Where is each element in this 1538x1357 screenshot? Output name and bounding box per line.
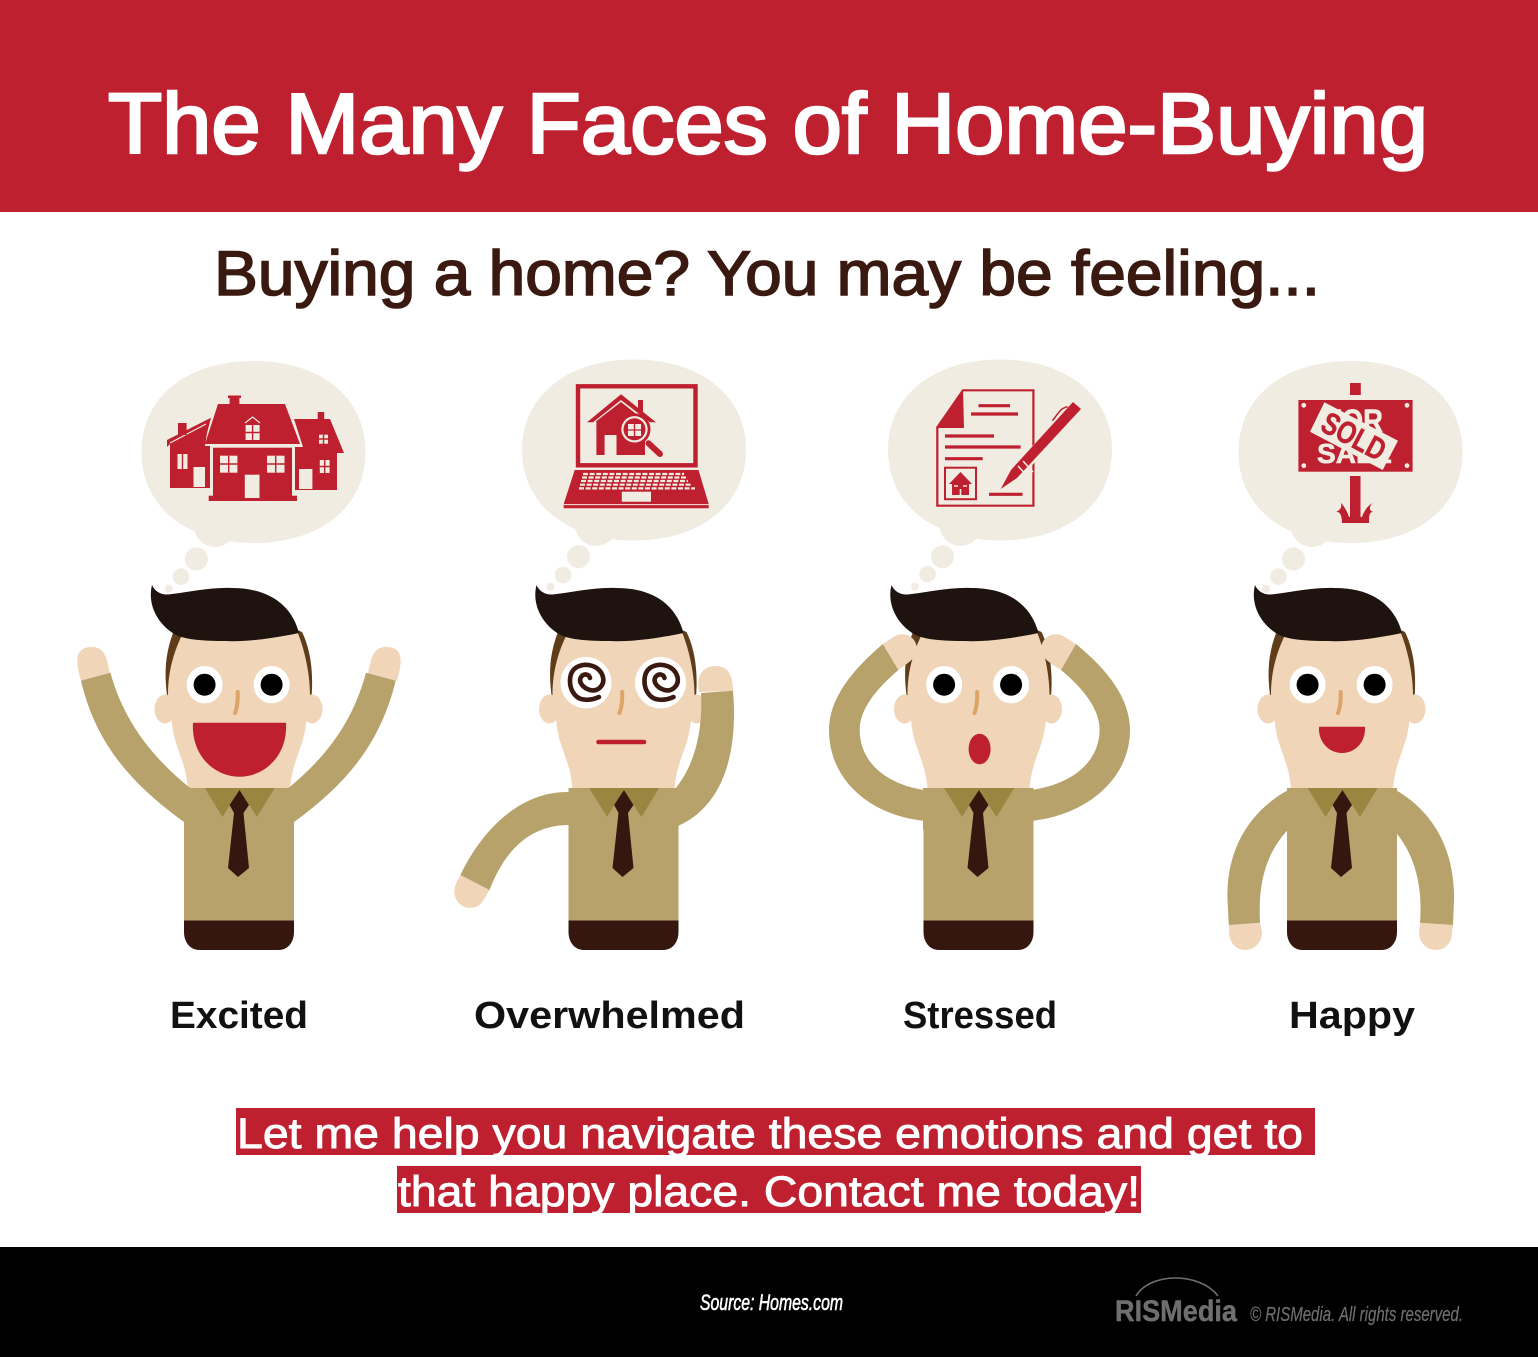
thought bubble: excited, houses bbox=[142, 361, 366, 593]
call to action: that happy place. Contact me today! bbox=[398, 1168, 1140, 1216]
arms bbox=[454, 666, 734, 908]
icon: contract and pen bbox=[936, 389, 1081, 506]
call to action bbox=[236, 1108, 1315, 1216]
character: stressed bbox=[829, 585, 1130, 950]
header banner bbox=[0, 0, 1538, 212]
character: excited bbox=[77, 585, 401, 950]
logo: RISMedia: RISMedia bbox=[1115, 1295, 1237, 1328]
footer bbox=[0, 1247, 1538, 1357]
source: Source: Homes.com bbox=[700, 1290, 843, 1315]
icon: houses bbox=[167, 396, 344, 501]
arms raised bbox=[77, 647, 401, 840]
thought bubble: overwhelmed, laptop bbox=[522, 360, 746, 591]
arms down bbox=[1227, 788, 1454, 950]
logo: RISMedia bbox=[1115, 1278, 1237, 1328]
label: stressed: Stressed bbox=[903, 995, 1057, 1037]
mouth: smile bbox=[1319, 727, 1365, 753]
icon: sold sign bbox=[1298, 383, 1413, 523]
spiral eyes bbox=[560, 657, 686, 708]
label: overwhelmed: Overwhelmed bbox=[474, 995, 745, 1037]
call to action: Let me help you navigate these emotions and get to bbox=[237, 1110, 1303, 1158]
thought bubble: stressed, contract bbox=[888, 360, 1112, 591]
mouth: flat line bbox=[598, 740, 644, 744]
title: The Many Faces of Home-Buying bbox=[108, 77, 1428, 172]
label: excited: Excited bbox=[170, 995, 308, 1037]
copyright: © RISMedia. All rights reserved. bbox=[1250, 1304, 1463, 1326]
icon: sold sign: FOR bbox=[1325, 403, 1383, 439]
mouth: open smile bbox=[193, 723, 286, 777]
arms on head bbox=[829, 634, 1130, 830]
character: overwhelmed bbox=[454, 585, 734, 950]
thought bubble: happy, sold sign bbox=[1238, 361, 1462, 593]
character: happy bbox=[1227, 585, 1454, 950]
label: happy: Happy bbox=[1289, 995, 1415, 1037]
icon: sold sign: SOLD bbox=[1316, 405, 1392, 468]
mouth: surprised bbox=[969, 734, 991, 764]
subtitle: Buying a home? You may be feeling... bbox=[214, 239, 1320, 309]
icon: sold sign: SALE bbox=[1317, 438, 1392, 469]
icon: laptop with house search bbox=[564, 386, 709, 508]
